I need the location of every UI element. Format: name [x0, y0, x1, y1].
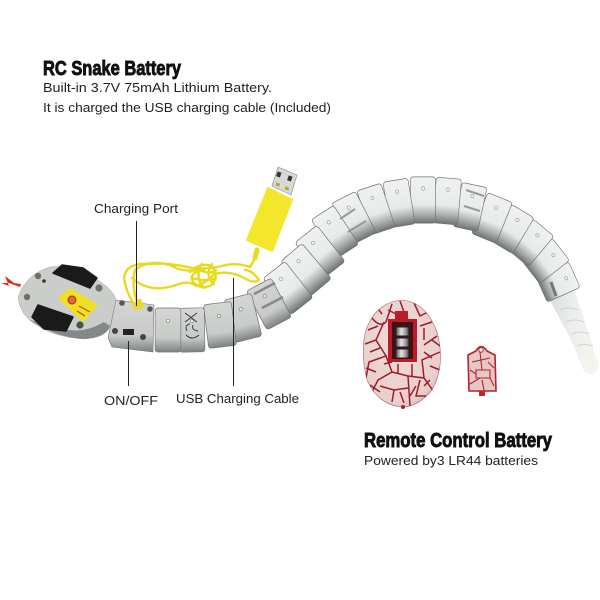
small remote transmitter [468, 346, 496, 396]
callout line: USB cable [232, 278, 234, 386]
description line 1: Built-in 3.7V 75mAh Lithium Battery. [43, 80, 272, 95]
snake body [108, 177, 600, 376]
label: charging port: Charging Port [94, 201, 178, 216]
infographic canvas [1, 60, 598, 468]
title: RC Snake Battery: RC Snake Battery [43, 58, 182, 80]
black patch top [53, 265, 97, 288]
snake head [1, 265, 116, 339]
tongue [1, 276, 21, 287]
tail tip [545, 285, 598, 373]
description line 2: It is charged the USB charging cable (Included) [43, 100, 331, 115]
battery compartment [388, 311, 417, 362]
black patch bottom [32, 305, 73, 331]
egg cracks [365, 301, 440, 406]
egg remote control [363, 300, 441, 409]
clip details [254, 283, 283, 308]
heading: remote control battery: Remote Control Battery [364, 430, 553, 452]
LR44 batteries [396, 327, 409, 358]
label: USB charging cable: USB Charging Cable [176, 391, 299, 406]
yellow sticker [58, 288, 98, 322]
yellow charging cable [124, 250, 259, 309]
remote battery description: Powered by3 LR44 batteries [364, 453, 539, 468]
CE marks [185, 313, 199, 338]
callout line: on/off [128, 341, 130, 386]
callout line: charging port [136, 221, 138, 306]
USB connector [247, 167, 297, 251]
label: on/off: ON/OFF [104, 393, 158, 408]
neck segment [108, 300, 154, 352]
